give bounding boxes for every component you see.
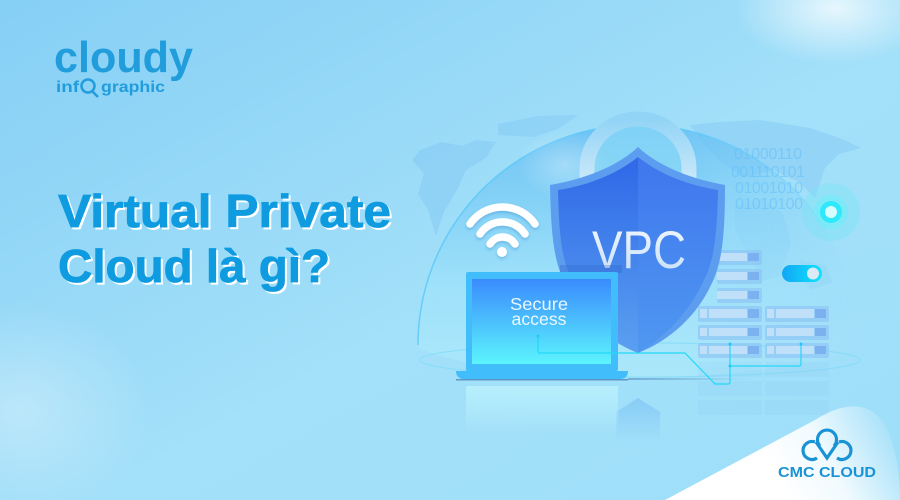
shield label: VPC [592,221,686,280]
title: Virtual Private [58,185,391,237]
logo word info: inf [56,79,80,96]
world map [412,115,861,290]
cmc cloud wordmark: CMC CLOUD [778,465,876,481]
shield [550,147,725,353]
wifi icon [470,207,535,256]
title: Cloud là gì? [60,242,332,294]
laptop [456,272,628,380]
logo word graphic: graphic [101,79,165,96]
laptop reflection [466,386,618,434]
binary digits: 001110101 [731,164,805,181]
title: Virtual Private [60,187,393,239]
binary digits: 01000110 [734,146,802,163]
ground shadow line [628,378,748,380]
cmc cloud logo [778,430,876,481]
binary digits: 01010100 [735,196,803,213]
dome highlight [517,131,613,199]
logo magnifier [82,80,98,97]
binary digits: 01001010 [735,180,803,197]
laptop shadow on shield [560,265,622,273]
laptop screen text: Secure [510,294,568,314]
circuit lines [536,334,802,384]
cmc cloud icon [803,430,851,459]
shield reflection [616,398,660,442]
laptop: access [512,309,567,329]
server reflection [698,362,829,415]
toggle switch [782,265,822,282]
title [58,185,393,294]
server racks [698,250,829,415]
logo word cloudy: cloudy [54,33,194,82]
platform ellipse [420,343,860,377]
padlock shackle [587,119,689,190]
corner panel [665,406,900,500]
dome [418,125,858,377]
binary digits [731,146,805,213]
cloudy infographic logo [54,33,194,97]
glow node [802,183,860,241]
title: Cloud là gì? [58,240,330,292]
